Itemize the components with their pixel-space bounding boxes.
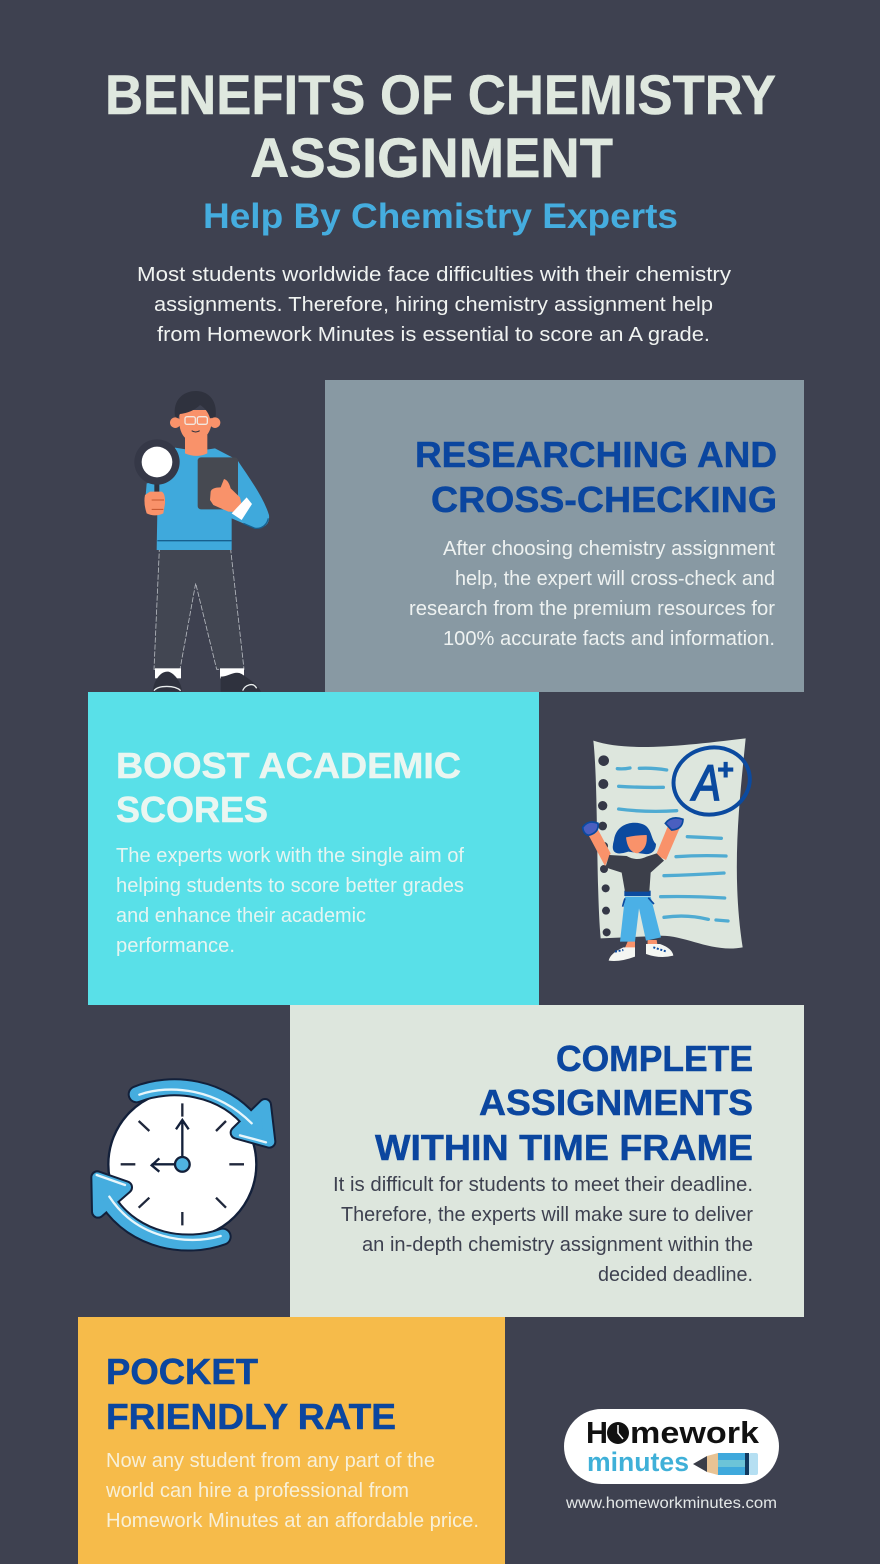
clock ticks: [121, 1103, 244, 1225]
heading: researching: CROSS-CHECKING: [431, 479, 777, 520]
heading: complete: [375, 1038, 753, 1168]
icon: man with magnifier and tablet: [134, 391, 269, 692]
paper: [593, 738, 746, 948]
panel: researching and cross-checking: [325, 380, 804, 692]
heading: boost: BOOST ACADEMIC: [116, 745, 461, 786]
girl: [583, 818, 683, 961]
heading: complete: ASSIGNMENTS: [479, 1082, 753, 1123]
tablet: [198, 457, 238, 509]
logo wordmark: H: [586, 1415, 608, 1450]
body: boost: The experts work with the single aim of: [116, 844, 464, 867]
magnifier: [134, 439, 180, 515]
icon: clock with circular arrows: [97, 1087, 269, 1243]
heading: pocket: FRIENDLY RATE: [106, 1396, 396, 1437]
body: complete: an in-depth chemistry assignment within the: [362, 1233, 753, 1256]
logo wordmark: mework: [630, 1415, 760, 1450]
intro text: from Homework Minutes is essential to score an A grade.: [157, 323, 710, 346]
heading: researching: RESEARCHING AND: [415, 434, 777, 475]
logo: homework minutes: [564, 1409, 779, 1484]
body: complete: Therefore, the experts will make sure to deliver: [341, 1203, 753, 1226]
heading: boost: SCORES: [116, 789, 268, 830]
body: boost: performance.: [116, 934, 235, 957]
title: BENEFITS OF CHEMISTRY: [105, 63, 776, 126]
pants: [154, 549, 244, 669]
panel: pocket friendly rate: [78, 1317, 505, 1564]
hand and cuff: [210, 479, 252, 520]
intro text: Most students worldwide face difficulties with their chemistry: [137, 263, 732, 286]
neck and head: [170, 391, 220, 456]
intro text: [137, 263, 732, 346]
clock hands: [152, 1120, 190, 1172]
body: pocket: Now any student from any part of the: [106, 1449, 435, 1472]
website url: www.homeworkminutes.com: [565, 1495, 777, 1512]
body: complete: It is difficult for students to meet their deadline.: [333, 1173, 753, 1196]
heading: researching: [415, 434, 777, 520]
heading: boost: [116, 745, 461, 830]
body: boost: helping students to score better grades: [116, 874, 464, 897]
body: researching: [409, 537, 775, 650]
body: complete: decided deadline.: [598, 1263, 753, 1286]
body: researching: After choosing chemistry assignment: [443, 537, 775, 560]
icon: pencil: [693, 1453, 758, 1475]
clock face: [108, 1090, 256, 1238]
arrow: bottom: [97, 1175, 223, 1243]
subtitle: Help By Chemistry Experts: [203, 197, 678, 236]
body: researching: research from the premium resources for: [409, 597, 775, 620]
panel: complete assignments within time frame: [290, 1005, 804, 1317]
socks and shoes: [153, 668, 261, 692]
A+ grade: +: [717, 754, 734, 786]
icon: girl with A+ paper: [583, 738, 756, 961]
body: pocket: world can hire a professional from: [105, 1479, 409, 1502]
paper lines: [617, 768, 728, 921]
heading: complete: WITHIN TIME FRAME: [375, 1127, 753, 1168]
body: pocket: Homework Minutes at an affordable price.: [106, 1509, 479, 1532]
logo minutes: minutes: [587, 1447, 689, 1477]
panel: boost academic scores: [88, 692, 539, 1005]
title: [105, 63, 776, 189]
heading: complete: COMPLETE: [556, 1038, 753, 1079]
heading: pocket: POCKET: [106, 1351, 258, 1392]
paper holes: [598, 755, 611, 936]
sweater: [145, 448, 269, 550]
logo wordmark: [586, 1415, 760, 1450]
heading: pocket: [106, 1351, 396, 1437]
body: researching: 100% accurate facts and information.: [443, 627, 775, 650]
body: boost: and enhance their academic: [116, 904, 366, 927]
body: pocket: [105, 1449, 479, 1532]
A+ grade: [667, 740, 756, 822]
arrow: top: [137, 1087, 269, 1142]
A+ grade: A: [690, 755, 721, 811]
intro text: assignments. Therefore, hiring chemistry assignment help: [154, 293, 713, 316]
title: ASSIGNMENT: [250, 126, 613, 189]
body: researching: help, the expert will cross-check and: [455, 567, 775, 590]
body: complete: [333, 1173, 753, 1286]
body: boost: [116, 844, 464, 957]
